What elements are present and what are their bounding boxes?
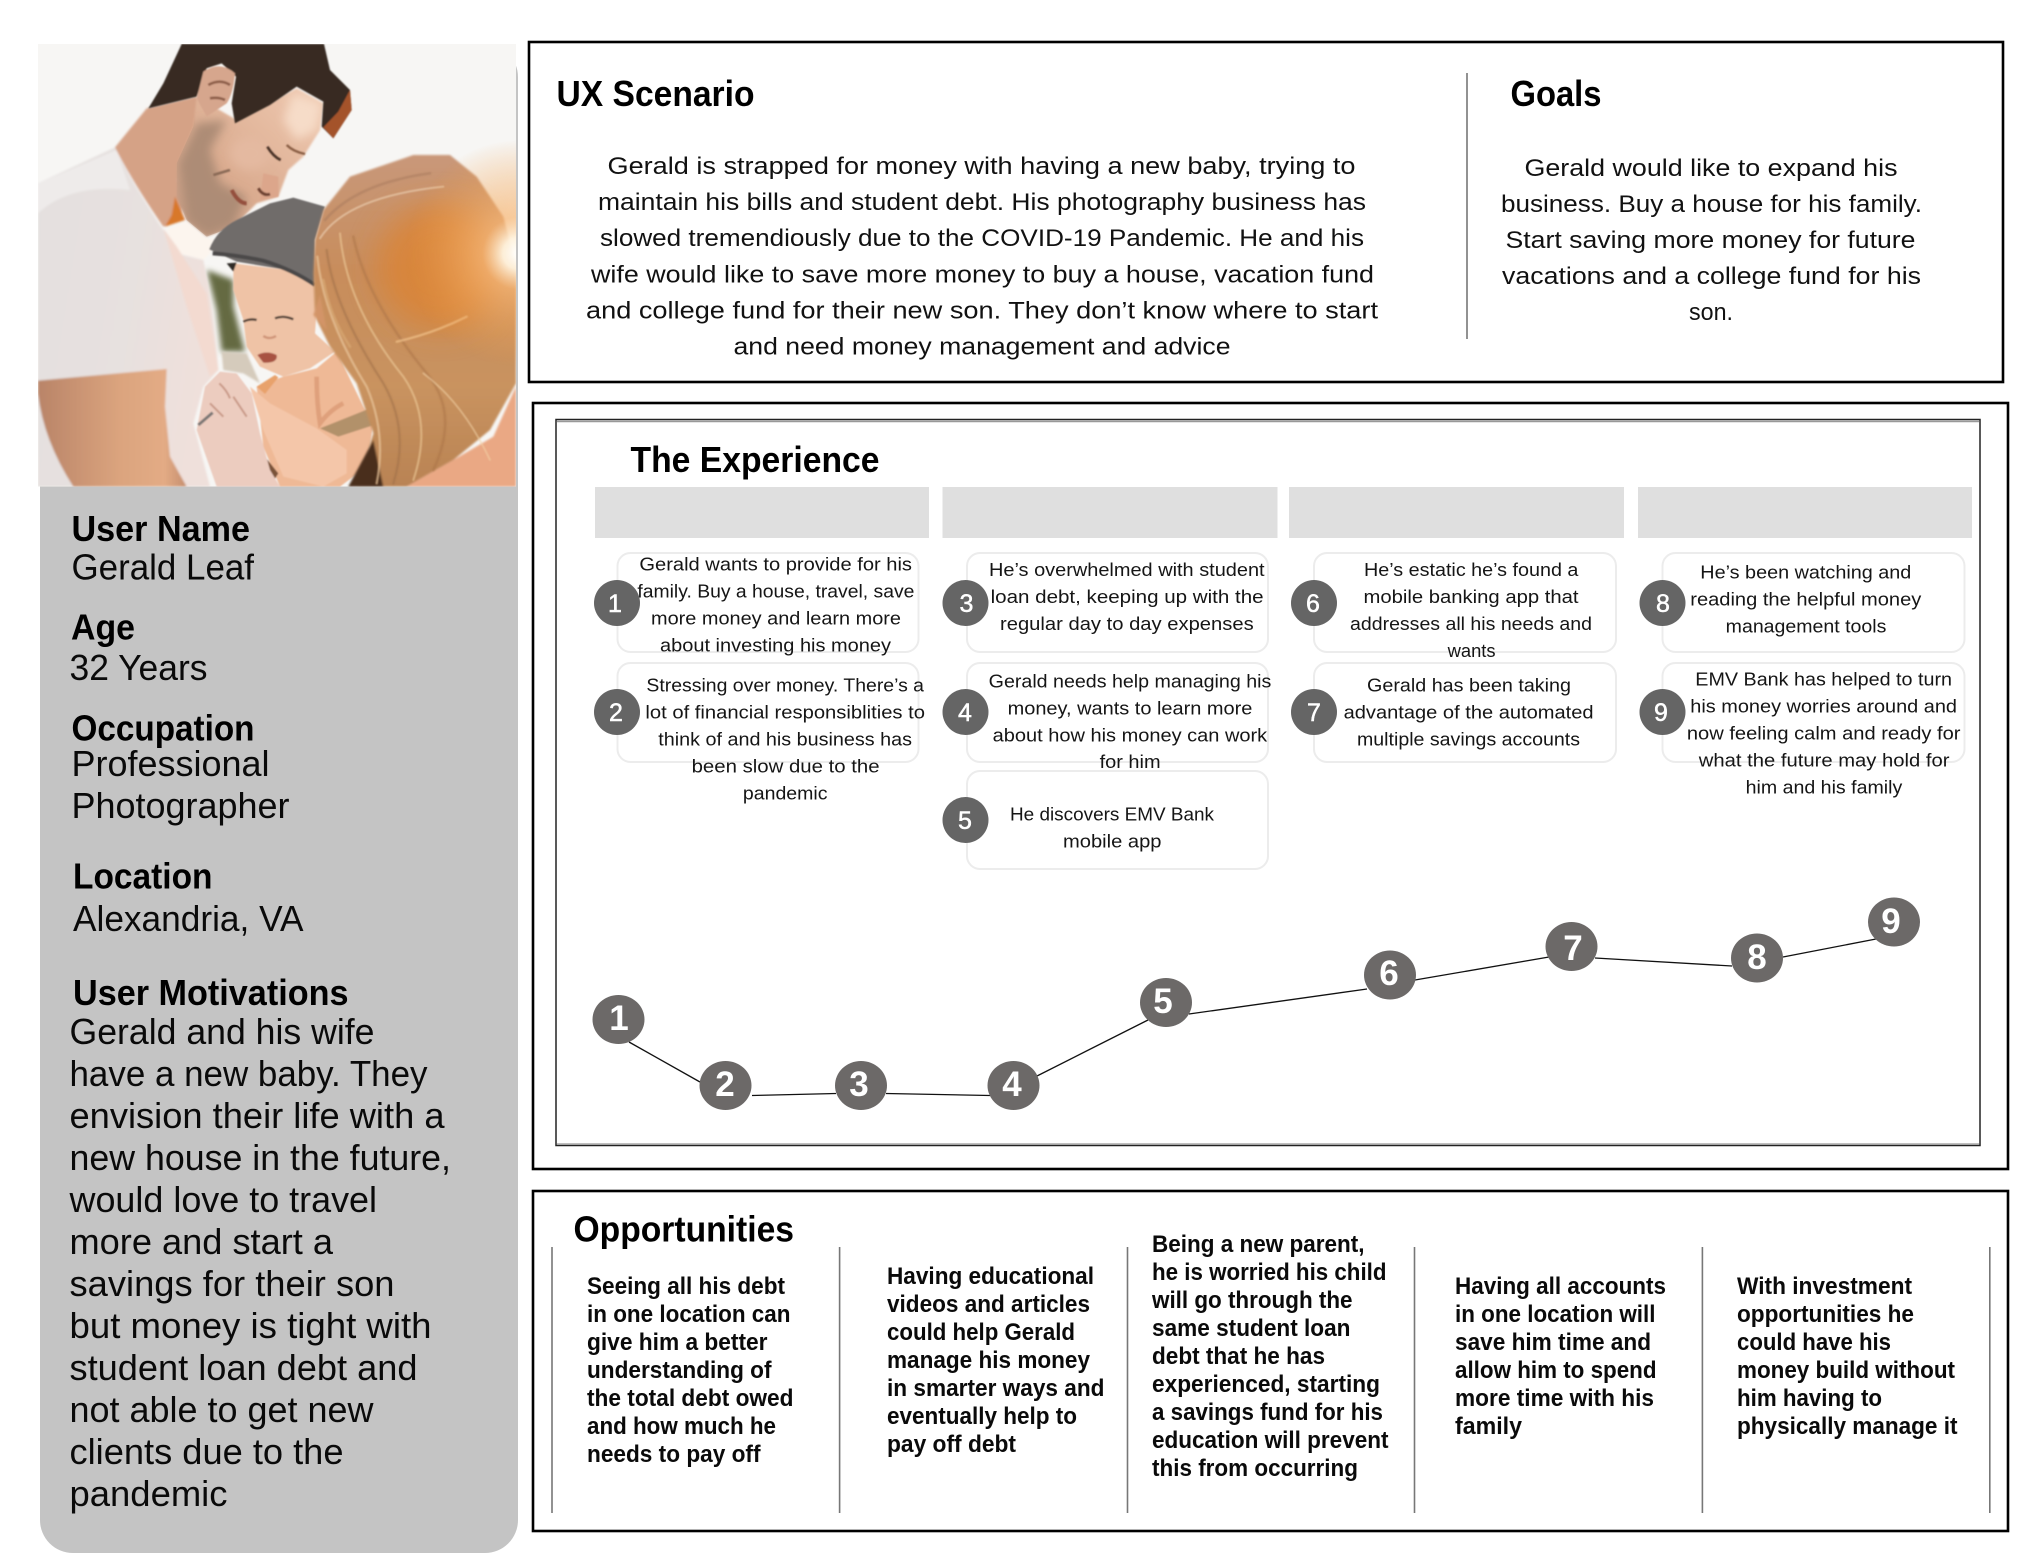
step 8 card: He’s been watching and: [1700, 563, 1911, 583]
heading: UX Scenario: UX Scenario: [556, 73, 754, 114]
step 4 card: Gerald needs help managing his: [989, 672, 1271, 692]
opportunity 1: understanding of: [587, 1357, 772, 1384]
panel: UX scenario and goals: [529, 42, 2003, 382]
step 1 card: [594, 553, 918, 656]
label: location: Location: [73, 856, 212, 896]
step 6 card: wants: [1447, 641, 1496, 661]
label: user name: [72, 508, 255, 588]
step 2 card: Stressing over money. There’s a: [646, 676, 925, 696]
label: age: Age: [71, 606, 135, 648]
label: occupation: Professional: [72, 743, 270, 784]
label: user motivations: but money is tight with: [70, 1305, 432, 1346]
label: user name: Gerald Leaf: [72, 546, 255, 588]
opportunity 3: debt that he has: [1152, 1343, 1325, 1370]
label: occupation: [72, 708, 290, 826]
step 7 card: [1291, 663, 1616, 762]
text block: scenario description: slowed tremendiously due to the COVID-19 Pandemic. He and his: [600, 225, 1364, 252]
text block: goals description: business. Buy a house for his family.: [1501, 191, 1922, 218]
text block: scenario description: and college fund for their new son. They don’t know where to start: [586, 298, 1378, 324]
opportunity 3: this from occurring: [1152, 1455, 1358, 1482]
opportunity 4: [1455, 1273, 1666, 1440]
opportunity 3: a savings fund for his: [1152, 1399, 1383, 1426]
step 6 card: 6: [1306, 590, 1320, 618]
panel background: [40, 44, 518, 1553]
step 9 card: 9: [1654, 699, 1668, 727]
label: age: 32 Years: [70, 647, 208, 688]
step 7 card: multiple savings accounts: [1357, 730, 1580, 750]
step 3 card: He’s overwhelmed with student: [989, 560, 1265, 580]
label: user motivations: pandemic: [70, 1473, 228, 1514]
step 1 card: family. Buy a house, travel, save: [637, 582, 914, 602]
chart: experience journey line: 6: [1379, 954, 1399, 993]
label: occupation: Photographer: [72, 785, 290, 826]
opportunity 4: save him time and: [1455, 1329, 1651, 1356]
step 5 card: mobile app: [1063, 832, 1162, 852]
chart: experience journey line: 3: [849, 1065, 869, 1104]
label: user motivations: [69, 972, 451, 1514]
step 2 card: think of and his business has: [658, 730, 912, 750]
chart: experience journey line: 1: [609, 999, 629, 1038]
label: location: [73, 856, 304, 939]
chart: experience journey line: [592, 898, 1920, 1110]
opportunity 4: in one location will: [1455, 1301, 1656, 1328]
header bars: four stage placeholders: [595, 487, 1972, 538]
opportunity 4: allow him to spend: [1455, 1357, 1656, 1384]
step 8 card: management tools: [1726, 617, 1886, 637]
step 3 card: loan debt, keeping up with the: [991, 587, 1264, 607]
text block: scenario description: Gerald is strapped for money with having a new baby, trying to: [608, 153, 1356, 180]
step 3 card: [942, 553, 1268, 652]
opportunity 2: videos and articles: [887, 1291, 1090, 1318]
step 6 card: mobile banking app that: [1364, 587, 1578, 607]
opportunity 4: Having all accounts: [1455, 1273, 1666, 1300]
opportunity 2: could help Gerald: [887, 1319, 1075, 1346]
step 2 card: pandemic: [743, 784, 828, 804]
label: user motivations: have a new baby. They: [70, 1053, 428, 1094]
opportunity 1: Seeing all his debt: [587, 1273, 785, 1300]
opportunity 3: [1151, 1231, 1389, 1482]
opportunity 5: money build without: [1737, 1357, 1955, 1384]
opportunity 5: [1737, 1273, 1958, 1440]
chart: experience journey line: 8: [1747, 938, 1767, 977]
step 9 card: his money worries around and: [1690, 697, 1957, 717]
step 8 card: reading the helpful money: [1690, 590, 1921, 610]
opportunity 1: the total debt owed: [587, 1385, 794, 1412]
label: user motivations: more and start a: [70, 1221, 334, 1262]
opportunity 2: manage his money: [887, 1347, 1091, 1374]
step 5 card: He discovers EMV Bank: [1010, 805, 1215, 825]
step 3 card: regular day to day expenses: [1000, 614, 1254, 634]
opportunity 1: needs to pay off: [587, 1441, 761, 1468]
opportunity 3: same student loan: [1152, 1315, 1350, 1342]
step 4 card: money, wants to learn more: [1008, 698, 1252, 718]
step 6 card: He’s estatic he’s found a: [1364, 560, 1579, 580]
opportunity 1: and how much he: [587, 1413, 776, 1440]
step 1 card: more money and learn more: [651, 608, 901, 628]
text block: goals description: vacations and a college fund for his: [1502, 263, 1921, 290]
opportunity 3: experienced, starting: [1152, 1371, 1380, 1398]
label: user name: User Name: [72, 508, 250, 549]
step 6 card: addresses all his needs and: [1350, 614, 1592, 634]
opportunity 3: he is worried his child: [1152, 1259, 1386, 1286]
panel: the experience: [533, 403, 2008, 1169]
text block: goals description: Gerald would like to expand his: [1524, 155, 1898, 182]
opportunity 1: give him a better: [587, 1329, 768, 1356]
step 7 card: advantage of the automated: [1344, 702, 1594, 722]
step 1 card: Gerald wants to provide for his: [639, 554, 912, 574]
text block: scenario description: wife would like to save more money to buy a house, vacation fund: [590, 262, 1374, 288]
label: user motivations: envision their life with a: [70, 1095, 445, 1136]
opportunity 5: him having to: [1737, 1385, 1882, 1412]
opportunity 1: [587, 1273, 794, 1468]
step 6 card: [1291, 553, 1616, 661]
opportunity 2: in smarter ways and: [887, 1375, 1104, 1402]
chart: experience journey line: 4: [1002, 1065, 1022, 1104]
opportunity 5: opportunities he: [1737, 1301, 1914, 1328]
chart: experience journey line: 7: [1563, 929, 1583, 968]
text block: goals description: Start saving more money for future: [1506, 227, 1916, 254]
opportunity 2: [887, 1263, 1104, 1458]
chart: experience journey line: 2: [715, 1065, 735, 1104]
text block: goals description: [1501, 155, 1922, 326]
label: location: Alexandria, VA: [73, 898, 304, 939]
label: user motivations: clients due to the: [70, 1431, 344, 1472]
opportunity 3: Being a new parent,: [1152, 1231, 1364, 1258]
panel: user profile card: [38, 44, 632, 1553]
step 2 card: 2: [609, 699, 623, 727]
step 4 card: [942, 663, 1271, 772]
opportunity 1: in one location can: [587, 1301, 790, 1328]
panel: opportunities: [533, 1191, 2008, 1531]
opportunity 5: could have his: [1737, 1329, 1891, 1356]
text block: scenario description: and need money management and advice: [734, 334, 1230, 360]
step 7 card: 7: [1307, 699, 1321, 727]
heading: Goals: Goals: [1510, 73, 1602, 114]
text block: scenario description: maintain his bills and student debt. His photography business has: [598, 189, 1366, 216]
opportunity 3: will go through the: [1151, 1287, 1352, 1314]
opportunity 2: eventually help to: [887, 1403, 1077, 1430]
opportunity 4: more time with his: [1455, 1385, 1654, 1412]
label: user motivations: User Motivations: [73, 972, 348, 1013]
label: age: [70, 606, 208, 688]
photo: father, baby and mother in sunlight: [38, 44, 516, 487]
label: user motivations: would love to travel: [69, 1179, 377, 1220]
step 9 card: [1640, 663, 1964, 798]
chart: experience journey line: 9: [1881, 902, 1901, 941]
text block: scenario description: [586, 153, 1378, 360]
step 4 card: about how his money can work: [993, 726, 1268, 746]
opportunity 2: pay off debt: [887, 1431, 1016, 1458]
step 1 card: 1: [608, 590, 622, 618]
step 9 card: him and his family: [1746, 778, 1902, 798]
heading: The Experience: The Experience: [630, 439, 880, 480]
step 1 card: about investing his money: [660, 636, 891, 656]
opportunity 2: Having educational: [887, 1263, 1094, 1290]
opportunity 5: physically manage it: [1737, 1413, 1958, 1440]
heading: Opportunities: Opportunities: [574, 1208, 794, 1250]
step 4 card: 4: [958, 699, 972, 727]
opportunity 4: family: [1455, 1413, 1523, 1440]
step 3 card: 3: [960, 590, 973, 618]
step 9 card: now feeling calm and ready for: [1687, 724, 1961, 744]
chart: experience journey line: 5: [1153, 982, 1173, 1021]
step 7 card: Gerald has been taking: [1367, 676, 1571, 696]
label: user motivations: Gerald and his wife: [70, 1011, 374, 1052]
step 5 card: 5: [958, 807, 972, 835]
label: user motivations: savings for their son: [70, 1263, 394, 1304]
step 4 card: for him: [1100, 752, 1161, 772]
opportunity 5: With investment: [1737, 1273, 1912, 1300]
opportunity 3: education will prevent: [1152, 1427, 1389, 1454]
label: user motivations: new house in the future,: [70, 1137, 451, 1178]
text block: goals description: son.: [1689, 299, 1733, 326]
step 8 card: 8: [1656, 590, 1670, 618]
step 2 card: [594, 663, 925, 804]
step 2 card: lot of financial responsiblities to: [645, 702, 925, 722]
label: user motivations: student loan debt and: [70, 1347, 418, 1388]
step 5 card: [942, 771, 1268, 869]
step 2 card: been slow due to the: [692, 756, 880, 776]
step 9 card: EMV Bank has helped to turn: [1695, 670, 1952, 690]
label: user motivations: not able to get new: [70, 1389, 374, 1430]
step 9 card: what the future may hold for: [1698, 751, 1950, 771]
label: occupation: Occupation: [72, 708, 254, 748]
step 8 card: [1640, 553, 1964, 652]
